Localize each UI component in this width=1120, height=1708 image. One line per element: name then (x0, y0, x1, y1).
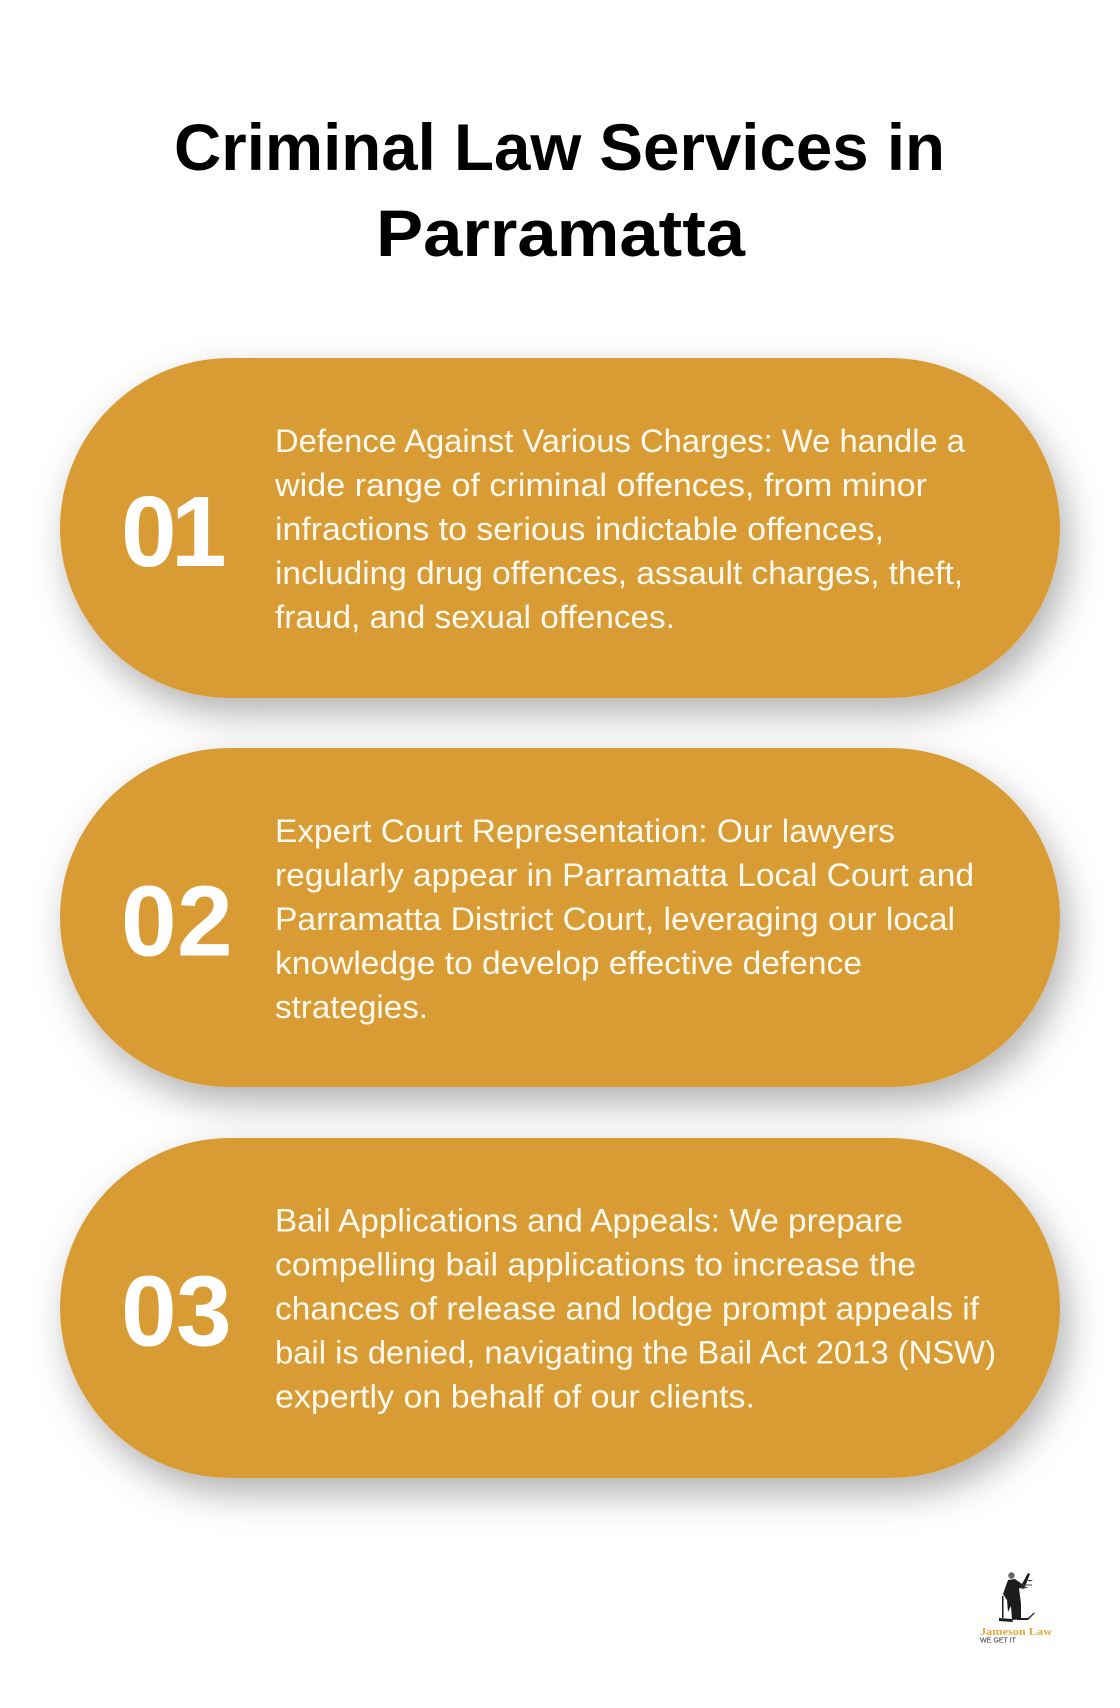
body text 2: strategies. (275, 989, 428, 1025)
body text 1: infractions to serious indictable offences, (275, 511, 884, 547)
icon: lady justice figure (999, 1572, 1035, 1622)
title: Parramatta (376, 196, 746, 270)
body text 3: compelling bail applications to increase the (275, 1246, 916, 1282)
logo wordmark: Jameson Law (980, 1626, 1052, 1638)
body text 1: wide range of criminal offences, from minor (274, 467, 927, 503)
pill background 3 (60, 1138, 1060, 1478)
pill background 1 (60, 358, 1060, 698)
body text 3: chances of release and lodge prompt appeals if (275, 1290, 979, 1326)
body text 2: Parramatta District Court, leveraging our local (275, 901, 955, 937)
body text 3: expertly on behalf of our clients. (275, 1378, 755, 1414)
body text 1 (274, 423, 965, 635)
body text 2: regularly appear in Parramatta Local Court and (275, 857, 974, 893)
body text 1: Defence Against Various Charges: We handle a (275, 423, 965, 459)
body text 1: including drug offences, assault charges, theft, (275, 555, 963, 591)
number 01: 01 (121, 476, 227, 588)
panel: defence against various charges (60, 358, 1060, 698)
panel: expert court representation (60, 748, 1060, 1087)
number 02: 02 (121, 866, 233, 978)
number 03: 03 (121, 1256, 232, 1368)
body text 2 (275, 813, 974, 1025)
panel: bail applications and appeals (60, 1138, 1060, 1478)
body text 3 (275, 1202, 996, 1414)
logo tagline: WE GET IT (980, 1636, 1016, 1644)
body text 3: Bail Applications and Appeals: We prepare (275, 1202, 903, 1238)
body text 1: fraud, and sexual offences. (275, 599, 675, 635)
body text 2: Expert Court Representation: Our lawyers (275, 813, 895, 849)
body text 3: bail is denied, navigating the Bail Act 2013 (NSW) (275, 1334, 996, 1370)
body text 2: knowledge to develop effective defence (275, 945, 862, 981)
title (174, 110, 945, 270)
title: Criminal Law Services in (174, 110, 945, 184)
pill background 2 (60, 748, 1060, 1087)
logo: Jameson Law (980, 1572, 1052, 1644)
